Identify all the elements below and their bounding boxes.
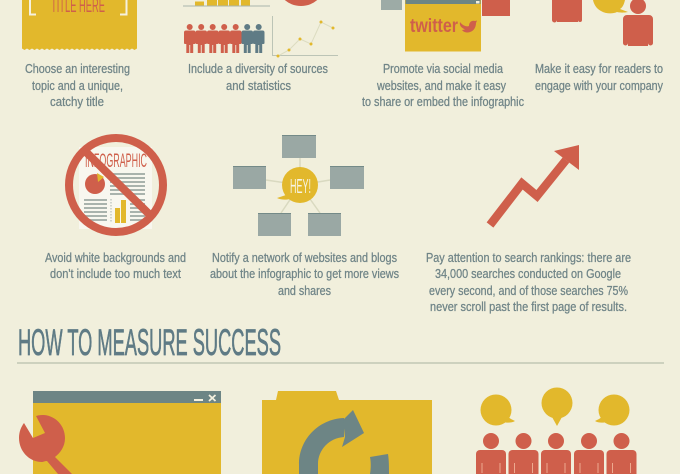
chart: line chart	[272, 16, 338, 58]
icon: speech bubble	[593, 0, 628, 13]
chart: yellow bars	[183, 0, 270, 6]
icon: twitter window: twitter	[410, 16, 459, 37]
icon: refresh arrows	[299, 410, 389, 474]
icon: browser window	[33, 391, 221, 474]
icon: red window	[482, 0, 510, 16]
text: engage caption: engage with your company	[535, 79, 664, 93]
panel: folder with refresh icon	[262, 391, 432, 474]
text: choose caption: Choose an interesting	[25, 62, 130, 76]
text: social caption: Promote via social media	[383, 62, 503, 76]
panel: browser window with wrench	[19, 391, 221, 474]
text: choose caption: topic and a unique,	[32, 79, 123, 93]
icon: network diagram	[233, 135, 364, 236]
text: search caption: never scroll past the first page of results.	[430, 300, 627, 314]
text: engage caption: Make it easy for readers to	[535, 62, 663, 76]
text: notify caption: about the infographic to get more views	[210, 267, 399, 281]
icon: twitter window	[405, 0, 481, 52]
text: notify caption: and shares	[278, 284, 331, 298]
icon: network diagram: HEY!	[290, 176, 311, 198]
text: choose caption	[25, 62, 130, 109]
icon: person left	[552, 0, 582, 22]
panel: diversity of sources	[183, 0, 338, 93]
icon: person right	[623, 0, 653, 46]
text: notify caption: Notify a network of websites and blogs	[212, 251, 397, 265]
panel: people talking	[476, 388, 636, 474]
text: search caption: Pay attention to search rankings: there are	[426, 251, 631, 265]
text: diversity caption	[188, 62, 328, 93]
text: engage caption	[535, 62, 664, 93]
chart: red pie	[276, 0, 326, 6]
panel: search rankings	[426, 145, 631, 314]
icon: crossed-out infographic: INFOGRAPHIC	[85, 151, 147, 172]
panel: choose a title	[22, 0, 137, 109]
arrow: rising trend	[490, 145, 579, 225]
icon: speech bubbles	[480, 388, 630, 426]
text: social caption	[362, 62, 524, 109]
chart: people pictogram	[184, 24, 264, 53]
text: social caption: to share or embed the infographic	[362, 95, 524, 109]
panel: avoid white backgrounds	[45, 138, 186, 281]
icon: row of people	[476, 433, 636, 474]
text: notify caption	[210, 251, 399, 298]
text: search caption: every second, and of those searches 75%	[429, 284, 628, 298]
text: search caption	[426, 251, 631, 314]
text: search caption: 34,000 searches conducted on Google	[435, 267, 621, 281]
text: diversity caption: Include a diversity of sources	[188, 62, 328, 76]
icon: wrench	[19, 415, 72, 474]
text: HOW TO MEASURE SUCCESS	[18, 322, 281, 363]
icon: crossed-out infographic	[69, 138, 163, 232]
panel: engage readers	[535, 0, 664, 93]
text: diversity caption: and statistics	[226, 79, 291, 93]
icon: folder	[262, 391, 432, 474]
panel: notify network	[210, 135, 399, 298]
text: avoid caption	[45, 251, 186, 281]
text: avoid caption: don't include too much text	[50, 267, 181, 281]
panel: social media	[362, 0, 524, 109]
text: avoid caption: Avoid white backgrounds and	[45, 251, 186, 265]
text: choose caption: catchy title	[50, 95, 104, 109]
icon: gray window	[381, 0, 402, 10]
text: social caption: websites, and make it easy	[376, 79, 507, 93]
